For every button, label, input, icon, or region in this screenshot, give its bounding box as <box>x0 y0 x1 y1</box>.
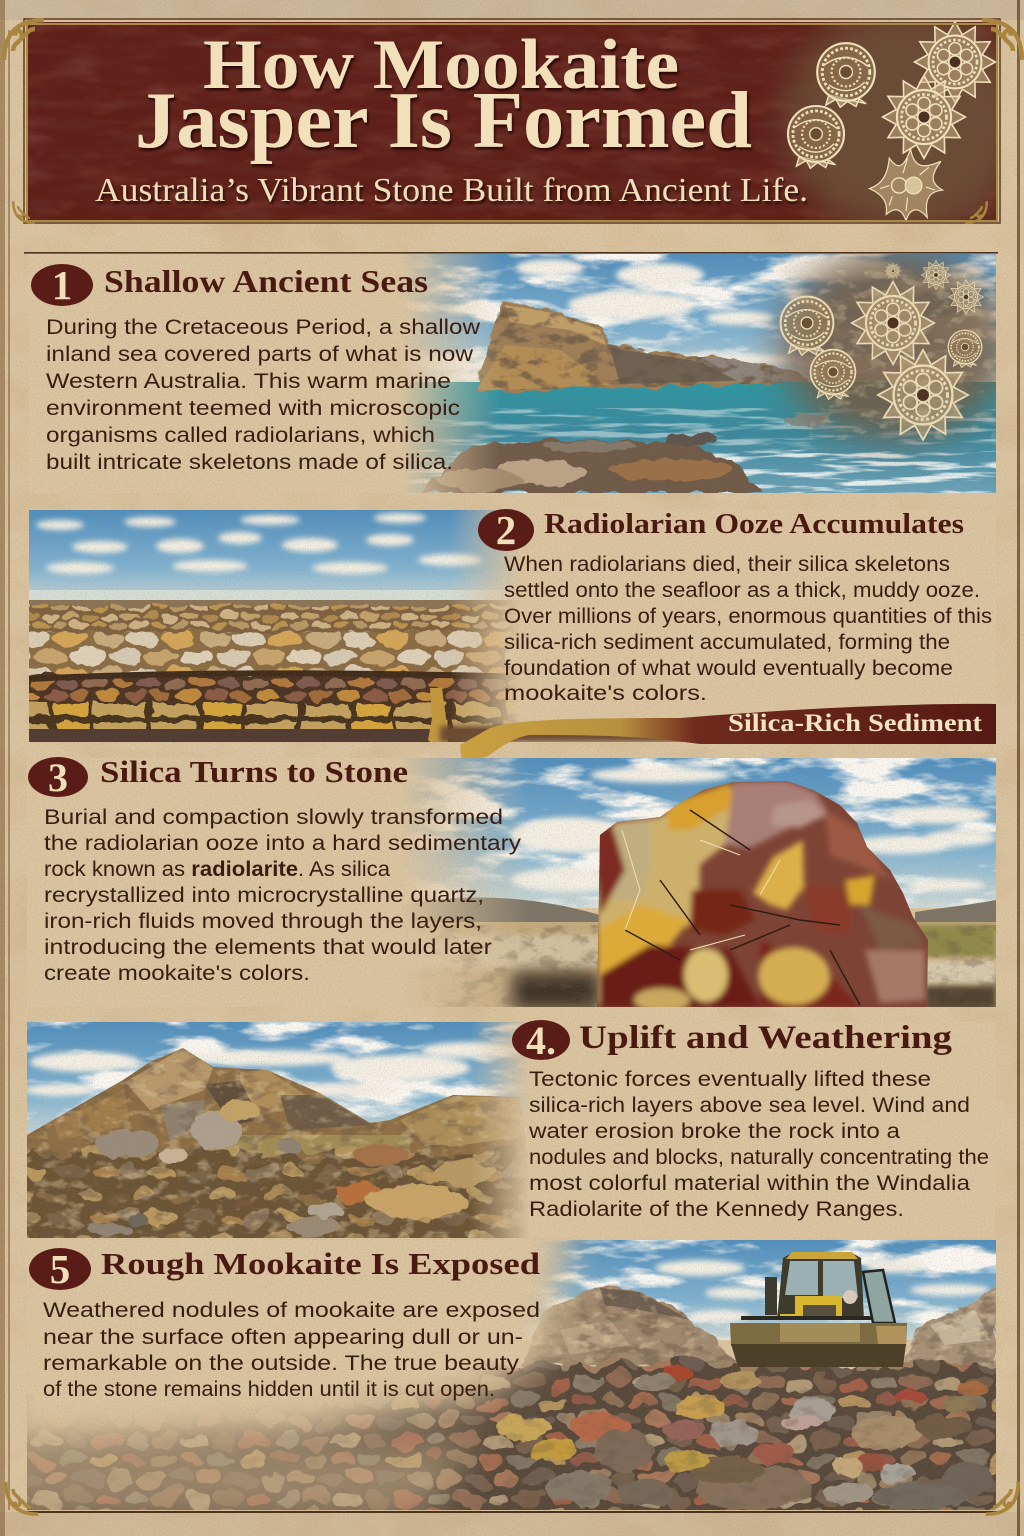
body text: mookaite's colors. <box>504 682 707 705</box>
body text <box>504 553 992 705</box>
panel: step 3 silica turns to stone <box>27 754 996 1012</box>
body text: near the surface often appearing dull or un- <box>43 1326 523 1349</box>
mookaite boulder <box>596 781 928 1012</box>
title: How Mookaite <box>203 26 679 104</box>
step badge 3 <box>28 755 88 800</box>
title <box>135 26 752 165</box>
body text: the radiolarian ooze into a hard sedimentary <box>44 832 522 855</box>
parchment fade behind text <box>27 1240 596 1468</box>
step badge 5: 5 <box>50 1246 70 1292</box>
step badge 5 <box>29 1246 91 1292</box>
icon: banner corner ornaments <box>4 20 1022 223</box>
landscape illustration <box>400 758 996 1010</box>
body text <box>44 806 522 985</box>
seascape illustration <box>400 250 1010 493</box>
body text: inland sea covered parts of what is now <box>46 343 474 366</box>
body text <box>528 1068 989 1221</box>
body text: most colorful material within the Windalia <box>529 1172 970 1195</box>
body text: built intricate skeletons made of silica. <box>46 451 453 474</box>
body text: recrystallized into microcrystalline quartz, <box>44 884 484 907</box>
step badge 4: 4. <box>526 1018 556 1063</box>
body text: Radiolarite of the Kennedy Ranges. <box>529 1198 904 1221</box>
body text <box>46 316 481 474</box>
body text: nodules and blocks, naturally concentrating the <box>529 1146 989 1169</box>
body text: settled onto the seafloor as a thick, muddy ooze. <box>504 579 980 602</box>
icon: banner radiolarians <box>788 22 995 220</box>
step badge 1 <box>31 262 93 308</box>
icon: bottom corner ornaments <box>6 1482 1018 1514</box>
panel: step 5 rough mookaite exposed <box>27 1240 996 1510</box>
seafloor illustration <box>20 510 540 750</box>
panel: step 4 uplift and weathering <box>0 1018 995 1250</box>
body text: foundation of what would eventually become <box>504 657 953 680</box>
body text: silica-rich layers above sea level. Wind and <box>529 1094 970 1117</box>
subtitle: Australia’s Vibrant Stone Built from Ancient Life. <box>95 172 808 209</box>
silica-rich sediment ribbon <box>460 704 996 762</box>
heading: Rough Mookaite Is Exposed <box>101 1246 540 1281</box>
heading: Shallow Ancient Seas <box>104 263 428 299</box>
body text: iron-rich fluids moved through the layers, <box>44 910 482 933</box>
body text: rock known as radiolarite. As silica <box>44 858 390 881</box>
step badge 2 <box>478 507 534 553</box>
body text: Tectonic forces eventually lifted these <box>529 1068 931 1091</box>
title: Jasper Is Formed <box>135 77 752 165</box>
panel: step 1 shallow ancient seas <box>29 250 1010 493</box>
silica-rich sediment ribbon: Silica-Rich Sediment <box>728 710 983 737</box>
body text: organisms called radiolarians, which <box>46 424 435 447</box>
step badge 4 <box>512 1018 570 1063</box>
body text: remarkable on the outside. The true beauty <box>43 1352 520 1375</box>
body text: of the stone remains hidden until it is cut open. <box>43 1378 495 1401</box>
body text: When radiolarians died, their silica skeletons <box>504 553 950 576</box>
step badge 1: 1 <box>52 262 72 308</box>
body text <box>43 1299 540 1401</box>
body text: water erosion broke the rock into a <box>528 1120 900 1143</box>
body text: Burial and compaction slowly transformed <box>44 806 503 829</box>
step badge 3: 3 <box>48 755 68 800</box>
body text: create mookaite's colors. <box>44 962 310 985</box>
rocky field illustration <box>20 1240 1010 1520</box>
body text: Weathered nodules of mookaite are exposed <box>43 1299 540 1322</box>
step badge 2: 2 <box>496 507 516 553</box>
heading: Radiolarian Ooze Accumulates <box>544 508 964 540</box>
title banner <box>2 18 1024 224</box>
body text: During the Cretaceous Period, a shallow <box>46 316 481 339</box>
body text: environment teemed with microscopic <box>46 397 460 420</box>
body text: silica-rich sediment accumulated, forming the <box>504 631 950 654</box>
heading: Uplift and Weathering <box>579 1020 953 1056</box>
icon: radiolarians <box>781 260 983 440</box>
body text: Over millions of years, enormous quantities of this <box>504 605 992 628</box>
body text: Western Australia. This warm marine <box>46 370 451 393</box>
body text: introducing the elements that would later <box>44 936 492 959</box>
heading: Silica Turns to Stone <box>100 754 408 789</box>
panel: step 2 radiolarian ooze <box>20 507 996 762</box>
mountain illustration <box>27 1022 526 1238</box>
bulldozer <box>730 1252 907 1367</box>
